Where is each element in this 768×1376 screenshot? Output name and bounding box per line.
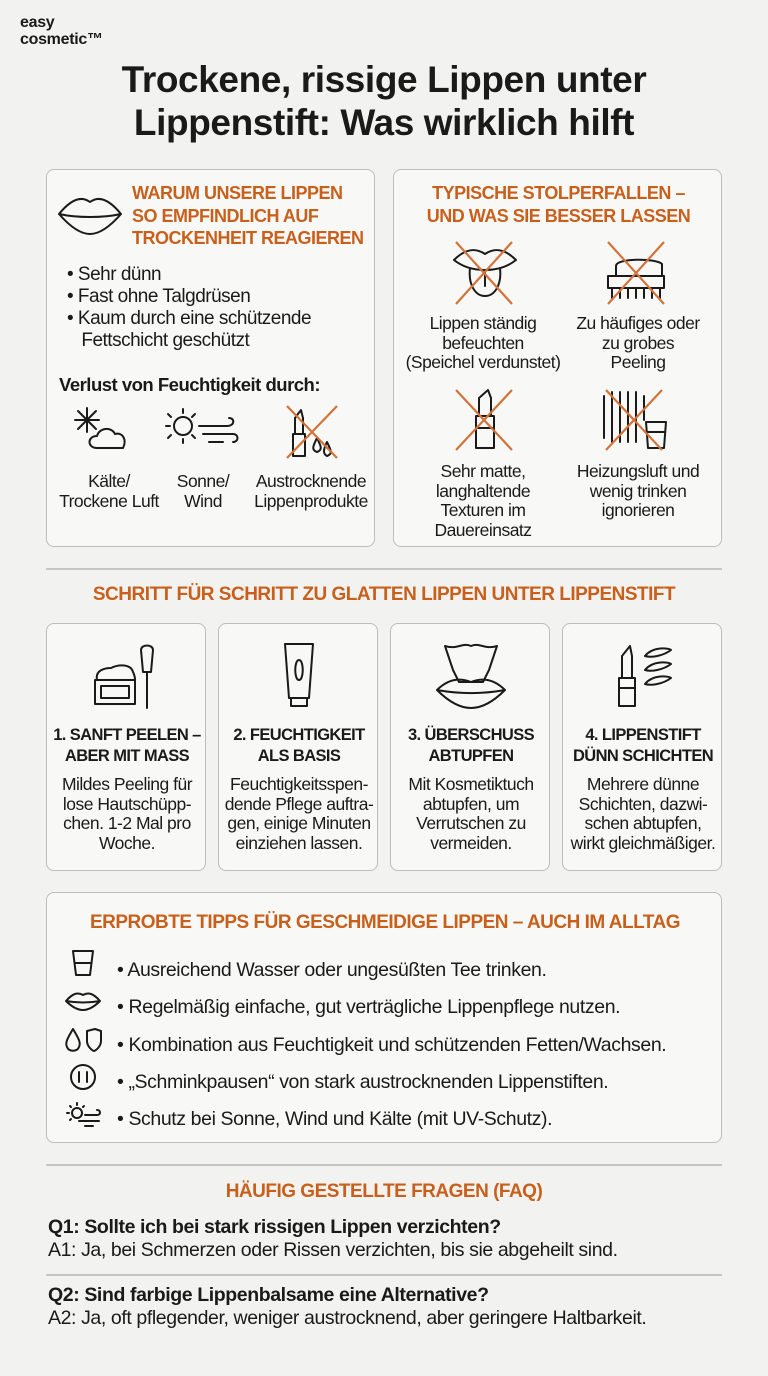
text xyxy=(570,774,715,852)
faq 2: A2: Ja, oft pflegender, weniger austrocknend, aber geringere Haltbarkeit. xyxy=(48,1307,646,1329)
label: langhaltende xyxy=(436,480,530,500)
icon: lips xyxy=(65,992,101,1011)
label: Heizungsluft und xyxy=(577,461,699,481)
heading: TYPISCHE STOLPERFALLEN – xyxy=(432,183,685,203)
heading: SO EMPFINDLICH AUF xyxy=(132,206,318,226)
tips list: • Ausreichend Wasser oder ungesüßten Tee trinken. xyxy=(117,959,546,981)
text: Feuchtigkeitsspen- xyxy=(230,774,368,794)
icon: radiator crossed xyxy=(603,389,667,451)
text: vermeiden. xyxy=(430,832,512,852)
label: Lippen ständig xyxy=(430,313,536,333)
title xyxy=(233,726,366,765)
label: zu grobes xyxy=(602,332,674,352)
heading: UND WAS SIE BESSER LASSEN xyxy=(427,206,690,226)
tips list: • Kombination aus Feuchtigkeit und schützenden Fetten/Wachsen. xyxy=(117,1034,666,1056)
label: ignorieren xyxy=(602,500,674,520)
tips list: • Schutz bei Sonne, Wind und Kälte (mit UV-Schutz). xyxy=(117,1108,552,1130)
bullet list: • Kaum durch eine schützende xyxy=(67,308,311,329)
panel: warum: Wind xyxy=(184,490,222,510)
title: DÜNN SCHICHTEN xyxy=(573,747,713,765)
icon: lipstick crossed xyxy=(455,389,513,451)
text xyxy=(62,774,192,852)
section heading: FAQ: HÄUFIG GESTELLTE FRAGEN (FAQ) xyxy=(226,1181,542,1202)
bullet list: • Fast ohne Talgdrüsen xyxy=(67,286,250,307)
step card 1 xyxy=(46,623,206,871)
section heading: steps: SCHRITT FÜR SCHRITT ZU GLATTEN LIPPEN UNTER LIPPENSTIFT xyxy=(93,584,675,605)
icon: lipstick crossed xyxy=(286,405,338,459)
title xyxy=(408,726,534,765)
faq 1: A1: Ja, bei Schmerzen oder Rissen verzichten, bis sie abgeheilt sind. xyxy=(48,1239,618,1261)
icon: tissue on lips xyxy=(436,644,506,709)
label: (Speichel verdunstet) xyxy=(406,352,560,372)
text: chen. 1-2 Mal pro xyxy=(63,813,191,833)
panel: tips xyxy=(46,892,722,1143)
labels: Kälte/ xyxy=(88,471,130,491)
faq 2 xyxy=(48,1284,646,1329)
title: Lippenstift: Was wirklich hilft xyxy=(134,102,634,143)
title xyxy=(122,59,646,143)
text: Schichten, dazwi- xyxy=(579,794,707,814)
label: Texturen im xyxy=(441,500,525,520)
icon: lips xyxy=(58,198,122,235)
bullet list: Fettschicht geschützt xyxy=(81,330,249,351)
icon: drop and shield xyxy=(65,1028,102,1052)
label: befeuchten xyxy=(442,332,524,352)
panel: warum: Lippenprodukte xyxy=(254,490,368,510)
heading: TROCKENHEIT REAGIEREN xyxy=(132,228,364,248)
faq 2: Q2: Sind farbige Lippenbalsame eine Alternative? xyxy=(48,1284,489,1306)
title: ABER MIT MASS xyxy=(65,747,189,765)
text: Mildes Peeling für xyxy=(62,774,192,794)
icon: tongue crossed xyxy=(453,241,517,305)
tips list xyxy=(117,959,666,1130)
title xyxy=(53,726,201,765)
bullet list: • Sehr dünn xyxy=(67,264,161,285)
title: 3. ÜBERSCHUSS xyxy=(408,726,534,744)
label xyxy=(434,461,532,540)
label: Sehr matte, xyxy=(441,461,525,481)
title xyxy=(573,726,713,765)
icon: sun wind xyxy=(165,408,238,444)
labels: Trockene Luft xyxy=(59,490,159,510)
step card 2 xyxy=(218,623,378,871)
text: Verrutschen zu xyxy=(416,813,526,833)
title: 1. SANFT PEELEN – xyxy=(53,726,201,744)
icon: glass xyxy=(72,950,94,976)
text: abtupfen, um xyxy=(423,794,519,814)
panel: stolperfallen xyxy=(393,169,722,547)
step card 4 xyxy=(562,623,722,871)
text: lose Hautschüpp- xyxy=(63,794,191,814)
text: dende Pflege auftra- xyxy=(225,794,373,814)
step card 3 xyxy=(390,623,550,871)
faq 1 xyxy=(48,1216,618,1261)
text: Woche. xyxy=(99,832,155,852)
label xyxy=(406,313,560,372)
heading: WARUM UNSERE LIPPEN xyxy=(132,183,343,203)
logo xyxy=(20,14,103,48)
icon: pause xyxy=(70,1064,96,1090)
icon: jar and brush xyxy=(94,644,154,709)
panel: warum: Sonne/ xyxy=(177,471,229,491)
subheading: Verlust von Feuchtigkeit durch: xyxy=(59,374,320,395)
panel: warum: Austrocknende xyxy=(256,471,366,491)
label: Peeling xyxy=(611,352,665,372)
labels xyxy=(59,471,160,510)
label xyxy=(577,461,699,520)
text xyxy=(225,774,374,852)
title: 4. LIPPENSTIFT xyxy=(585,726,701,744)
tips list: • „Schminkpausen“ von stark austrocknenden Lippenstiften. xyxy=(117,1071,608,1093)
text: einziehen lassen. xyxy=(236,832,362,852)
label xyxy=(576,313,700,372)
bullet list xyxy=(67,264,311,351)
icon: brush crossed xyxy=(607,241,665,305)
title: Trockene, rissige Lippen unter xyxy=(122,59,646,100)
icon: tube xyxy=(284,643,314,707)
tips list: • Regelmäßig einfache, gut verträgliche Lippenpflege nutzen. xyxy=(117,996,620,1018)
text: Mehrere dünne xyxy=(587,774,699,794)
heading xyxy=(427,183,690,226)
heading xyxy=(132,183,364,248)
text xyxy=(408,774,534,852)
logo: easy xyxy=(20,14,54,31)
title: 2. FEUCHTIGKEIT xyxy=(233,726,365,744)
label: Dauereinsatz xyxy=(434,520,532,540)
logo: cosmetic™ xyxy=(20,31,103,48)
icon: cold xyxy=(74,407,126,449)
panel: warum xyxy=(46,169,375,547)
label: Zu häufiges oder xyxy=(576,313,700,333)
text: schen abtupfen, xyxy=(584,813,702,833)
title: ALS BASIS xyxy=(258,747,340,765)
text: Mit Kosmetiktuch xyxy=(408,774,534,794)
label: wenig trinken xyxy=(590,480,686,500)
text: gen, einige Minuten xyxy=(227,813,371,833)
title: ABTUPFEN xyxy=(428,747,514,765)
text: wirkt gleichmäßiger. xyxy=(571,832,715,852)
heading: ERPROBTE TIPPS FÜR GESCHMEIDIGE LIPPEN – AUCH IM ALLTAG xyxy=(90,912,680,933)
faq 1: Q1: Sollte ich bei stark rissigen Lippen verzichten? xyxy=(48,1216,501,1238)
icon: sun wind xyxy=(66,1102,101,1127)
icon: lipstick with swatches xyxy=(618,645,672,707)
